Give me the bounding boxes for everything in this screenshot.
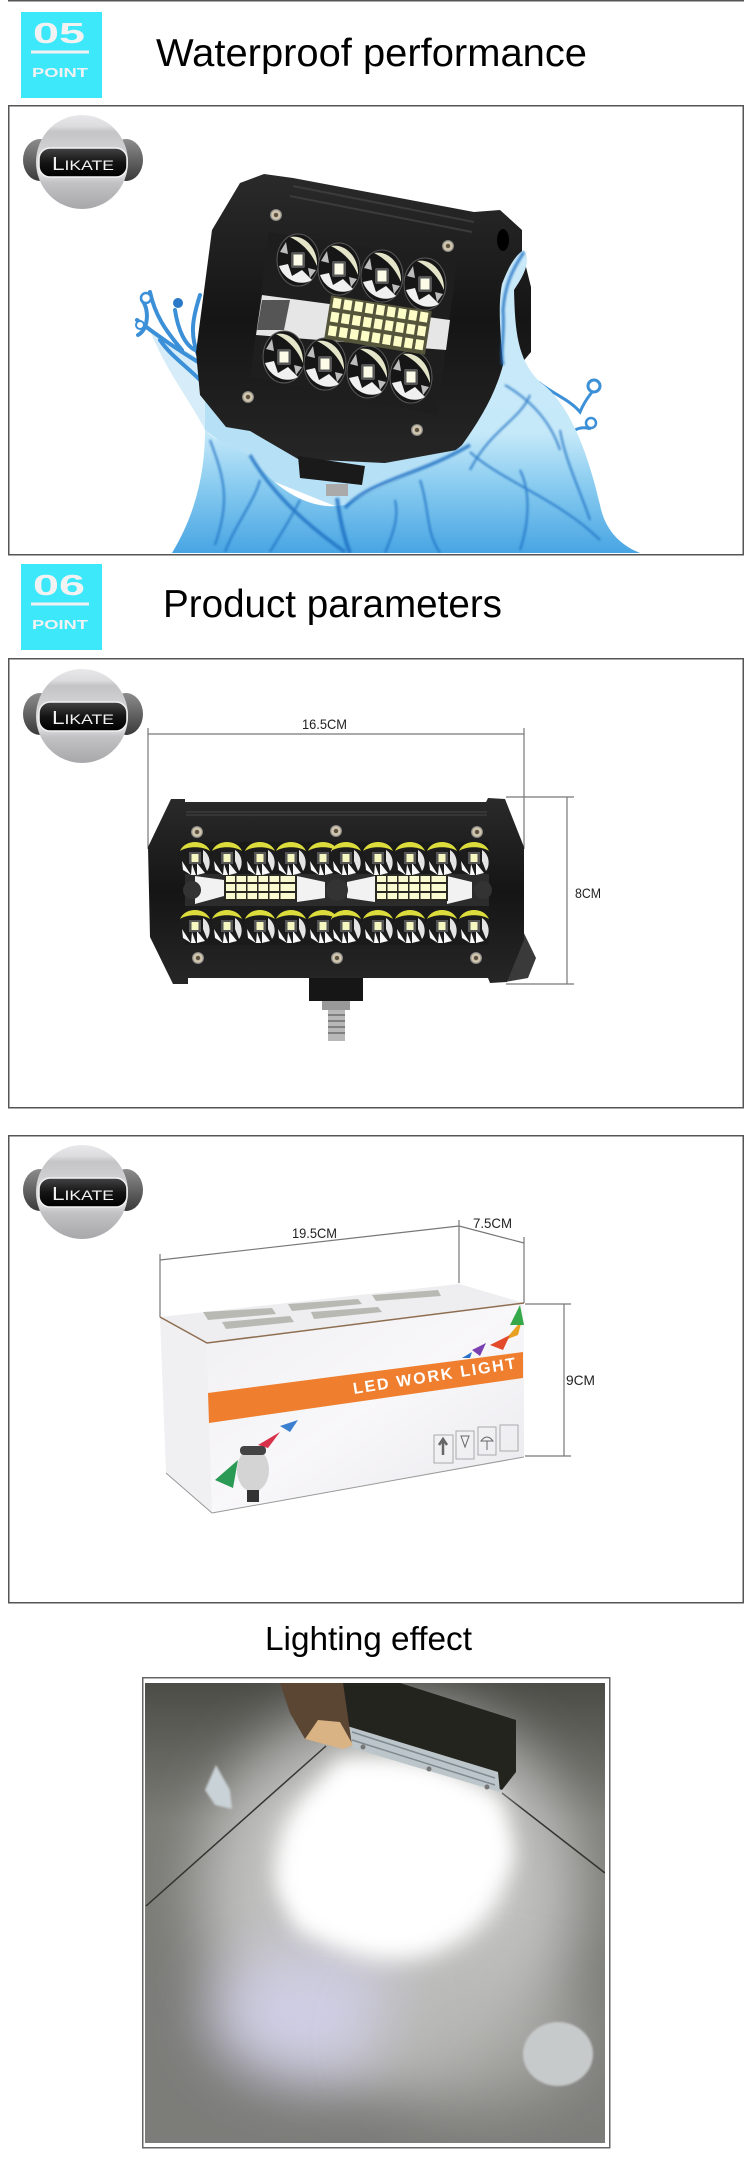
logo: Likate: LIKATE xyxy=(52,708,114,728)
lens row top xyxy=(179,841,490,875)
LED chip blocks xyxy=(224,875,448,901)
lamp: front view tilted xyxy=(196,174,531,496)
section 05 badge: POINT xyxy=(32,65,88,80)
robot bulb mascot xyxy=(215,1420,298,1502)
screws xyxy=(242,209,454,436)
top lens row xyxy=(277,234,446,310)
section 06 badge: 06 xyxy=(33,570,85,602)
mount and bolt xyxy=(309,978,363,1041)
screws xyxy=(191,825,483,964)
panel: lamp dimensions xyxy=(9,659,743,1108)
handling symbols xyxy=(434,1425,518,1463)
center connectors xyxy=(183,879,492,901)
title: Product parameters: Product parameters xyxy=(163,583,502,626)
logo: Likate: LIKATE xyxy=(52,1184,114,1204)
section 05 badge xyxy=(21,12,102,98)
tile seams xyxy=(146,1746,605,1906)
splash water behind lamp xyxy=(136,292,600,510)
dimension 9CM: 9CM xyxy=(566,1372,595,1388)
width dimension 16.5CM: 16.5CM xyxy=(302,716,347,732)
width dimension 16.5CM xyxy=(148,716,524,849)
panel: package dimensions xyxy=(9,1136,743,1603)
LED chip block xyxy=(324,295,432,355)
orange band xyxy=(208,1352,523,1423)
logo: Likate: LIKATE xyxy=(52,154,114,174)
dimension 19.5CM xyxy=(160,1220,459,1317)
dimension 7.5CM: 7.5CM xyxy=(473,1215,512,1231)
logo: Likate xyxy=(23,1145,143,1239)
section 05 badge: 05 xyxy=(33,18,85,50)
panel: waterproof xyxy=(9,106,743,555)
bottom lens row xyxy=(263,331,432,403)
box label: LED WORK LIGHT xyxy=(352,1355,517,1398)
main beam hot spot xyxy=(277,1760,509,1960)
hand xyxy=(280,1683,352,1748)
box top lamp pictures xyxy=(203,1290,441,1329)
product box xyxy=(160,1284,524,1513)
title: Lighting effect: Lighting effect xyxy=(265,1620,472,1657)
wall reflection xyxy=(205,1765,232,1809)
title: Waterproof performance: Waterproof performance xyxy=(156,32,587,75)
section 06 badge xyxy=(21,564,102,650)
reflected circle spot xyxy=(523,2022,593,2086)
mount and bolt xyxy=(298,456,365,496)
lamp in hand xyxy=(343,1683,516,1792)
height dimension 8CM: 8CM xyxy=(575,885,601,901)
colour triangles top xyxy=(462,1305,524,1358)
dimension 7.5CM xyxy=(459,1215,524,1303)
lens row bottom xyxy=(179,909,490,943)
section 06 badge: POINT xyxy=(32,617,88,632)
panel: lighting photo xyxy=(143,1678,610,2148)
lamp: front view xyxy=(148,798,536,1041)
floor glow xyxy=(200,1700,580,2080)
top divider line xyxy=(8,0,744,2)
height dimension 8CM xyxy=(506,797,601,984)
splash water in front of lamp xyxy=(172,250,640,553)
dimension 9CM xyxy=(525,1304,595,1456)
logo: Likate xyxy=(23,115,143,209)
dimension 19.5CM: 19.5CM xyxy=(292,1225,337,1241)
logo: Likate xyxy=(23,669,143,763)
